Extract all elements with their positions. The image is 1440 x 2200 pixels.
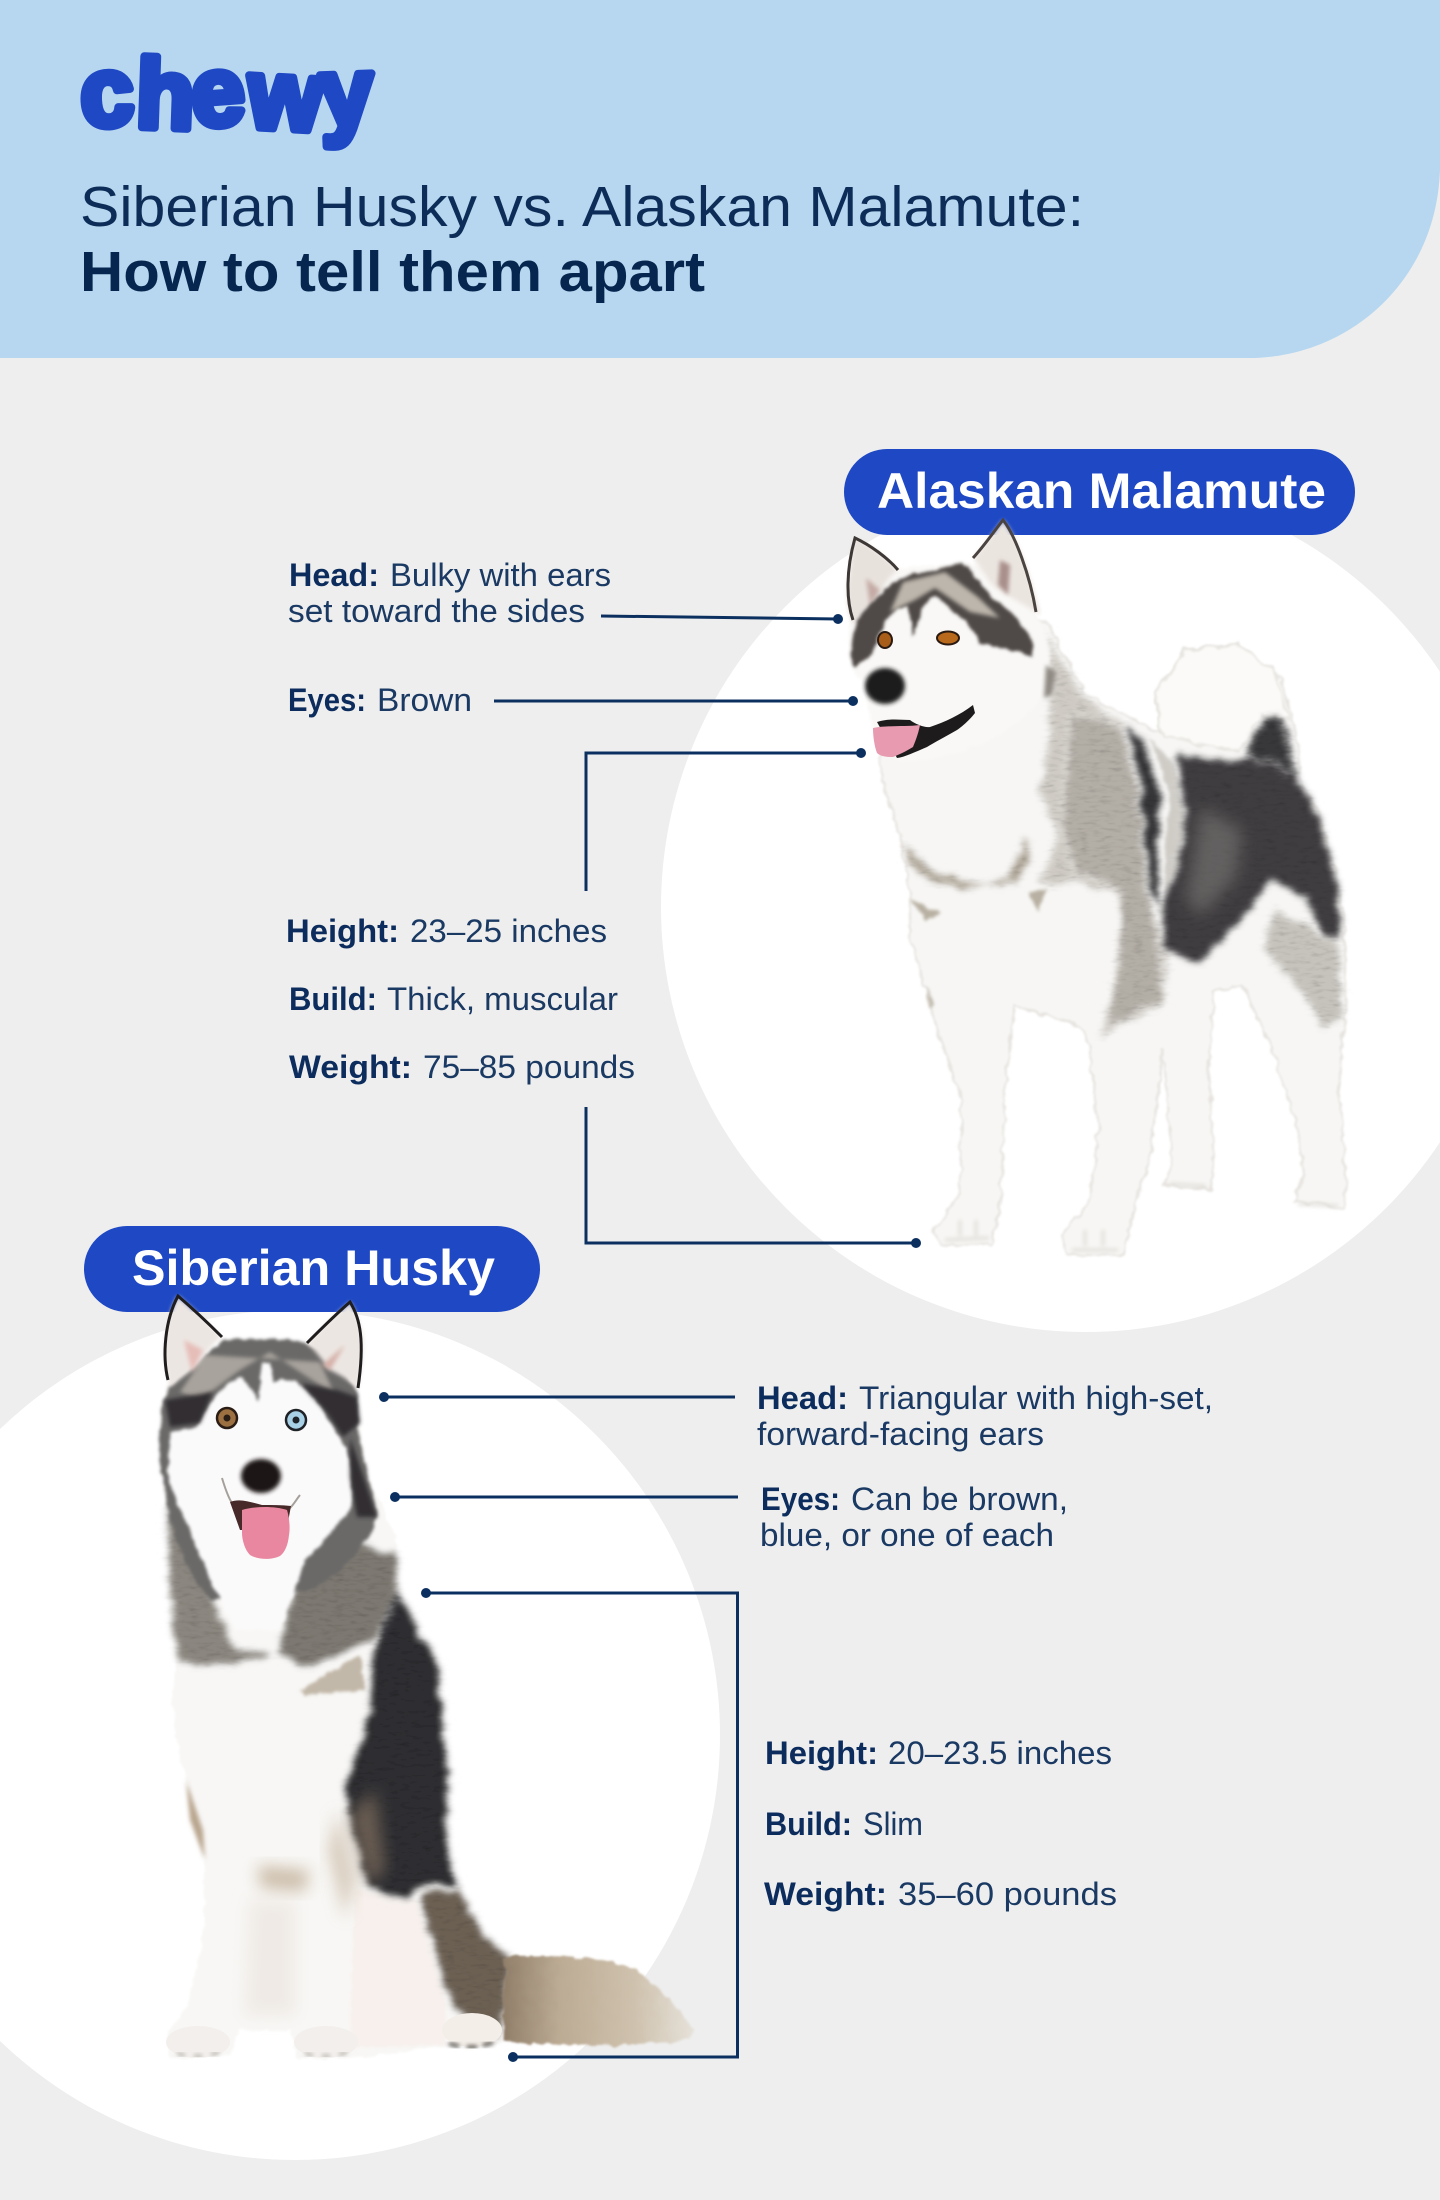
husky label: weight: Weight: (764, 1876, 887, 1912)
malamute neck mark (1044, 665, 1056, 698)
malamute label: build (289, 981, 618, 1017)
husky head base (159, 1339, 377, 1600)
malamute label: eyes: Eyes: (288, 682, 366, 718)
white circle: husky (0, 1310, 720, 2160)
title: Siberian Husky vs. Alaskan Malamute: (80, 175, 1084, 239)
header banner (0, 0, 1440, 358)
callout dots: husky (379, 1392, 518, 2062)
husky label: height: Height: (765, 1735, 878, 1771)
husky ear left (164, 1296, 222, 1387)
malamute label: height (286, 913, 607, 949)
malamute neck gray (1036, 630, 1170, 1040)
husky body silhouette (161, 1385, 502, 2058)
husky mask dark patches (165, 1383, 377, 1517)
husky ear left rim (165, 1296, 222, 1380)
malamute eyes (878, 632, 959, 648)
husky back paw (442, 2013, 502, 2047)
husky ear right (307, 1302, 363, 1390)
malamute chest marks (910, 888, 1048, 1008)
malamute label: weight (289, 1049, 635, 1085)
malamute light stripe (1150, 738, 1185, 899)
husky label: head: Triangular with high-set, (859, 1380, 1213, 1416)
malamute tail plume (1155, 644, 1290, 750)
husky lower back (418, 1885, 515, 2040)
husky mouth (230, 1500, 291, 1530)
husky ear right rim (307, 1302, 361, 1388)
malamute face mask (852, 563, 1033, 667)
malamute tail underside (1240, 712, 1296, 775)
chewy logo: chewy (77, 35, 375, 152)
husky nose (241, 1459, 281, 1493)
husky between-legs fur (245, 1900, 295, 2015)
malamute label: head: Head: (289, 557, 379, 593)
husky eyes (217, 1408, 306, 1430)
malamute shoulder mottling (1060, 715, 1165, 1030)
pill: Siberian Husky: Siberian Husky (132, 1240, 495, 1296)
malamute head (849, 563, 1049, 761)
husky label: eyes: Can be brown, (851, 1481, 1068, 1517)
husky face white (168, 1362, 353, 1630)
husky tongue (242, 1507, 290, 1559)
husky label: weight (764, 1876, 1117, 1912)
pill: Siberian Husky (84, 1226, 540, 1312)
malamute label: height: 23–25 inches (410, 913, 607, 949)
husky label: height: 20–23.5 inches (888, 1735, 1112, 1771)
white circle: malamute (661, 482, 1440, 1332)
husky white haunch (350, 1890, 445, 2048)
husky label: height (765, 1735, 1112, 1771)
husky label: build: Build: (765, 1806, 852, 1842)
illustration: Alaskan Malamute (847, 520, 1346, 1255)
husky belly tan (258, 1865, 310, 1892)
husky shoulder tan (300, 1655, 366, 1695)
malamute collar (900, 830, 1033, 891)
malamute label: height: Height: (286, 913, 399, 949)
malamute label: weight: Weight: (289, 1049, 412, 1085)
husky smile (222, 1478, 300, 1508)
malamute ear right (973, 520, 1040, 615)
callout dots: malamute (833, 614, 921, 1248)
malamute label: eyes: Brown (377, 682, 472, 718)
illustration: Siberian Husky (159, 1296, 694, 2058)
callout lines: husky (384, 1397, 738, 2057)
malamute ear right rim (973, 520, 1036, 612)
malamute label: head: Bulky with ears (390, 557, 611, 593)
malamute tongue (873, 725, 920, 757)
malamute label: head (288, 557, 611, 629)
malamute paws (945, 1184, 1338, 1250)
malamute forehead tan (890, 572, 1000, 618)
title (80, 175, 1084, 304)
malamute label: eyes (288, 682, 472, 718)
malamute body silhouette (880, 600, 1346, 1255)
husky collar right (275, 1540, 400, 1672)
husky front paws (166, 2026, 358, 2058)
husky tail (502, 1956, 694, 2045)
malamute nose (865, 668, 905, 704)
husky ear right inner (322, 1345, 345, 1370)
husky left leg tan (186, 1780, 205, 1860)
malamute label: build: Thick, muscular (387, 981, 618, 1017)
husky label: build (765, 1806, 923, 1842)
malamute rear thigh (1262, 905, 1346, 1030)
malamute ear left (847, 538, 898, 625)
title: How to tell them apart (80, 240, 705, 304)
callout lines: malamute (494, 616, 916, 1243)
husky label: eyes: Eyes: (761, 1481, 840, 1517)
malamute saddle lighter centre (1186, 807, 1242, 916)
husky label: head (757, 1380, 1213, 1452)
husky dark back (342, 1589, 459, 1902)
husky label: build: Slim (863, 1806, 923, 1842)
husky label: eyes: blue, or one of each (760, 1517, 1054, 1553)
husky label: head: Head: (757, 1380, 848, 1416)
husky ear left inner (184, 1340, 203, 1372)
malamute dark saddle (1160, 710, 1344, 965)
malamute mouth (877, 705, 975, 758)
husky forehead gray (180, 1352, 335, 1400)
malamute ear right inner (998, 560, 1010, 595)
husky label: weight: 35–60 pounds (898, 1876, 1117, 1912)
husky inner leg shade (328, 1810, 355, 1920)
malamute ear left inner (866, 578, 880, 605)
malamute dark stripe (1122, 721, 1165, 916)
husky collar left (165, 1500, 275, 1668)
pill: Alaskan Malamute: Alaskan Malamute (877, 463, 1326, 519)
husky label: eyes (760, 1481, 1068, 1553)
malamute label: build: Build: (289, 981, 377, 1017)
malamute label: head: set toward the sides (288, 593, 585, 629)
husky back brown (350, 1790, 385, 1885)
malamute ear left rim (848, 538, 898, 620)
husky label: head: forward-facing ears (757, 1416, 1044, 1452)
malamute label: weight: 75–85 pounds (423, 1049, 635, 1085)
pill: Alaskan Malamute (844, 449, 1355, 535)
